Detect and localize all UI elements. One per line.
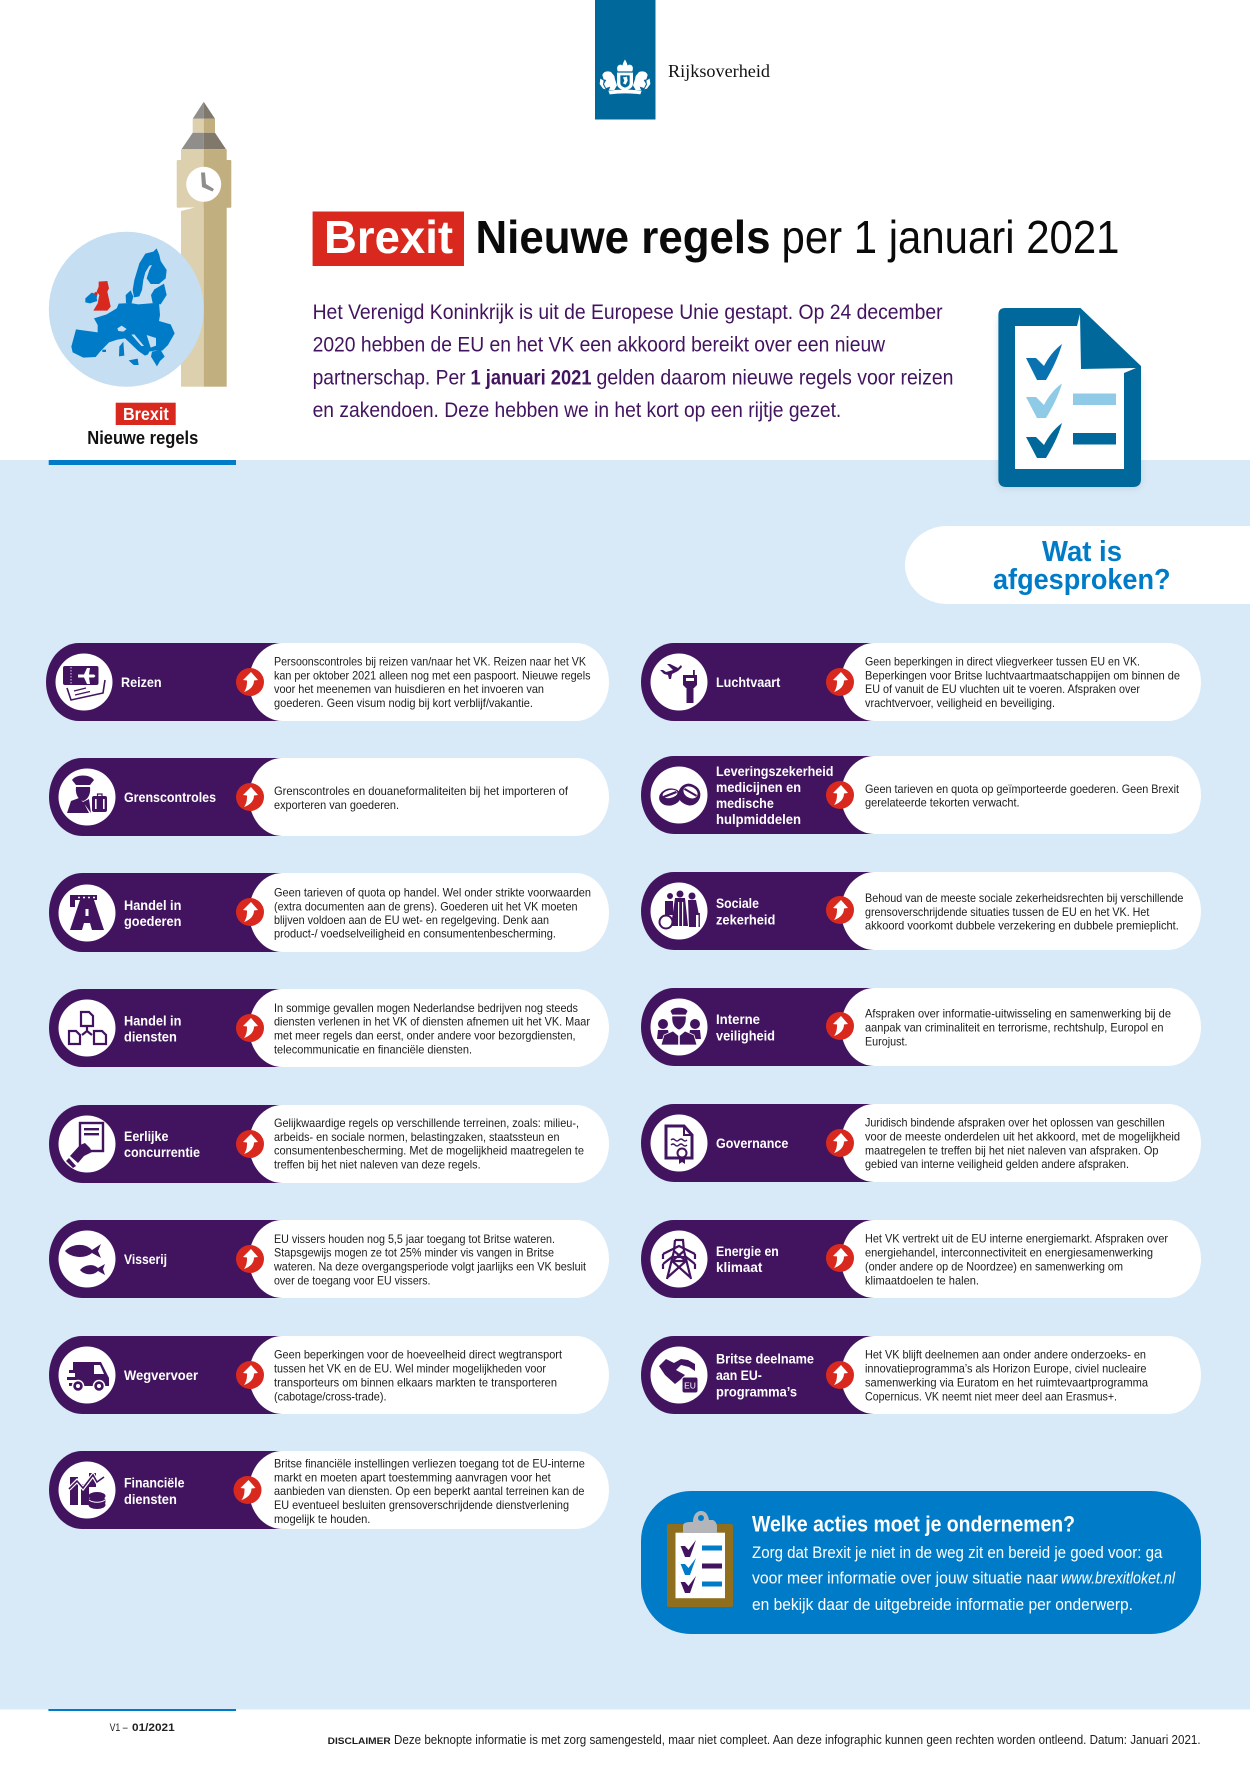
body text: (extra documenten aan de grens). Goederen uit het VK moeten <box>274 900 578 913</box>
body text: over de toegang voor EU vissers. <box>274 1274 430 1288</box>
label: Luchtvaart <box>716 674 781 690</box>
label: medische <box>716 795 774 811</box>
footer: version: 01/2021 <box>132 1722 175 1734</box>
body text: voor het meenemen van huisdieren en het invoeren van <box>274 683 544 696</box>
label <box>124 1474 185 1507</box>
title: Brexit <box>324 211 453 263</box>
icon: handshake with EU badge <box>659 1359 698 1393</box>
body text: diensten verlenen in het VK of diensten afnemen uit het VK. Maar <box>274 1016 590 1029</box>
label <box>124 897 181 929</box>
callout text: Zorg dat Brexit je niet in de weg zit en bereid je goed voor: ga <box>752 1543 1163 1562</box>
body text: klimaatdoelen te halen. <box>865 1274 979 1287</box>
light blue content band <box>0 460 1250 1710</box>
intro text <box>313 301 954 422</box>
label: Eerlijke <box>124 1128 169 1144</box>
callout text <box>752 1543 1176 1614</box>
arrow <box>826 1244 854 1272</box>
label: Governance <box>716 1135 788 1151</box>
body text: (cabotage/cross-trade). <box>274 1390 386 1403</box>
body text <box>865 1117 1180 1171</box>
footer: version <box>110 1722 175 1734</box>
body text: In sommige gevallen mogen Nederlandse bedrijven nog steeds <box>274 1002 578 1015</box>
body text <box>274 1002 590 1056</box>
icon: security officer <box>657 1007 701 1045</box>
body text: wateren. Na deze overgangsperiode volgt jaarlijks een VK besluit <box>273 1260 587 1274</box>
body text: kan per oktober 2021 alleen nog met een paspoort. Nieuwe regels <box>274 669 591 682</box>
intro text: 1 januari 2021 <box>470 366 592 390</box>
panel: Luchtvaart <box>641 643 1201 721</box>
arrow <box>826 1361 854 1389</box>
arrow <box>826 1012 854 1040</box>
label: Financiële <box>124 1474 185 1490</box>
body text: akkoord voorkomt dubbele verzekering en dubbele premieplicht. <box>865 920 1179 932</box>
panel: Grenscontroles <box>49 758 609 836</box>
callout text: voor meer informatie over jouw situatie naar <box>752 1568 1058 1588</box>
label: diensten <box>124 1028 177 1044</box>
body text: consumentenbescherming. Met de mogelijkheid maatregelen te <box>274 1145 584 1158</box>
body text <box>865 1008 1171 1048</box>
body text: EU of vanuit de EU vluchten uit te voeren. Afspraken over <box>865 683 1140 696</box>
label: Energie en <box>716 1243 779 1259</box>
body text <box>865 1233 1168 1287</box>
body text: (onder andere op de Noordzee) en samenwerking om <box>865 1261 1123 1274</box>
small badge: Brexit: Brexit <box>123 404 169 424</box>
body text: Persoonscontroles bij reizen van/naar het VK. Reizen naar het VK <box>274 656 586 668</box>
label: aan EU- <box>716 1367 762 1383</box>
icon: document with seal <box>666 1126 692 1164</box>
body text: Juridisch bindende afspraken over het oplossen van geschillen <box>865 1117 1165 1130</box>
body text: Geen tarieven en quota op geïmporteerde goederen. Geen Brexit <box>865 783 1180 796</box>
small heading: Nieuwe regels: Nieuwe regels <box>87 428 198 448</box>
label: hulpmiddelen <box>716 811 801 827</box>
callout text: en bekijk daar de uitgebreide informatie per onderwerp. <box>752 1595 1133 1614</box>
body text: product-/ voedselveiligheid en consumentenbescherming. <box>274 928 556 941</box>
icon: connected documents <box>69 1012 106 1044</box>
label: veiligheid <box>716 1028 775 1044</box>
label <box>716 1350 814 1400</box>
label: Reizen <box>121 674 162 690</box>
label <box>716 1243 779 1275</box>
label: Wegvervoer <box>124 1367 198 1383</box>
label <box>716 763 834 827</box>
panel: Reizen <box>46 643 609 721</box>
body text: Afspraken over informatie-uitwisseling en samenwerking bij de <box>865 1008 1171 1021</box>
body text: Geen beperkingen in direct vliegverkeer tussen EU en VK. <box>865 656 1140 668</box>
body text: Geen tarieven of quota op handel. Wel onder strikte voorwaarden <box>274 886 591 900</box>
title: Nieuwe regels <box>476 211 770 263</box>
icon: clipboard <box>667 1511 733 1607</box>
body text <box>865 1349 1149 1403</box>
body text <box>865 783 1180 810</box>
body text: Grenscontroles en douaneformaliteiten bij het importeren of <box>274 785 569 798</box>
body text: gebied van interne veiligheid gelden andere afspraken. <box>865 1158 1129 1171</box>
arrow <box>236 1130 264 1158</box>
arrow <box>236 1014 264 1042</box>
icon: fish <box>65 1244 105 1275</box>
body text <box>274 1117 584 1172</box>
intro text: en zakendoen. Deze hebben we in het kort op een rijtje gezet. <box>313 399 841 422</box>
icon: plane and control tower <box>660 664 697 703</box>
body text: aanpak van criminaliteit en terrorisme, rechtshulp, Europol en <box>865 1022 1164 1035</box>
label: Britse deelname <box>716 1350 814 1366</box>
body text: aanbieden van diensten. Op een beperkt aantal terreinen kan de <box>274 1485 584 1498</box>
icon: van <box>67 1362 109 1392</box>
body text: Geen beperkingen voor de hoeveelheid direct wegtransport <box>274 1349 563 1362</box>
label <box>124 1128 200 1160</box>
icon: tickets <box>63 666 105 700</box>
body text: Stapsgewijs mogen ze tot 25% minder vis vangen in Britse <box>274 1247 554 1260</box>
footer: disclaimer: Deze beknopte informatie is met zorg samengesteld, maar niet compleet. Aan deze infographic kunnen geen rechten worden ontleend. Datum: Januari 2021. <box>394 1733 1201 1747</box>
body text <box>273 1233 587 1288</box>
body text: gerelateerde tekorten verwacht. <box>865 797 1020 810</box>
body text: met meer regels dan eerst, onder andere voor bezorgdiensten, <box>274 1030 576 1042</box>
panel: Governance <box>641 1104 1201 1182</box>
body text: exporteren van goederen. <box>274 799 399 812</box>
icon: road with barrier <box>70 895 104 930</box>
panel: Financiële diensten <box>49 1451 609 1529</box>
arrow <box>826 1129 854 1157</box>
body text: grensoverschrijdende situaties tussen de EU en het VK. Het <box>865 906 1150 919</box>
icon: border officer <box>67 776 107 813</box>
body text: telecommunicatie en financiële diensten. <box>274 1043 472 1056</box>
panel: Interne veiligheid <box>641 988 1201 1066</box>
body text: samenwerking via Euratom en het ruimtevaartprogramma <box>865 1376 1149 1389</box>
intro text: partnerschap. Per <box>313 366 466 390</box>
body text: vrachtvervoer, veiligheid en beveiliging. <box>865 697 1055 710</box>
body text: EU eventueel besluiten grensoverschrijdende dienstverlening <box>274 1499 569 1512</box>
panel: Eerlijke concurrentie <box>49 1105 609 1183</box>
EU map <box>71 248 175 366</box>
body text: Gelijkwaardige regels op verschillende terreinen, zoals: milieu-, <box>274 1117 579 1130</box>
body text: energiehandel, interconnectiviteit en energiesamenwerking <box>865 1247 1153 1260</box>
logo: Rijksoverheid <box>595 0 770 120</box>
arrow <box>236 668 264 696</box>
arrow <box>826 896 854 924</box>
arrow <box>826 668 854 696</box>
panel: Energie en klimaat <box>641 1220 1201 1298</box>
callout: Welke acties moet je ondernemen? <box>641 1491 1201 1634</box>
arrow <box>236 1361 264 1389</box>
panel: Britse deelname aan EU-programma's <box>641 1336 1201 1414</box>
EU circle <box>49 232 204 387</box>
footer rule <box>48 1709 236 1711</box>
panel: Leveringszekerheid medicijnen en medische hulpmiddelen <box>641 756 1201 834</box>
icon: handshake with EU badge: EU <box>684 1380 696 1390</box>
label: goederen <box>124 913 181 929</box>
body text: voor de meeste onderdelen uit het akkoord, met de mogelijkheid <box>865 1131 1180 1144</box>
label: Interne <box>716 1011 760 1027</box>
blue rule under small heading <box>49 460 236 465</box>
icon: pills <box>657 780 704 809</box>
icon: people with wheelchair <box>660 890 700 928</box>
body text: blijven voldoen aan de EU wet- en regelgeving. Denk aan <box>274 914 549 927</box>
body text: transporteurs om binnen elkaars markten te transporteren <box>274 1377 557 1390</box>
icon: charts and coins <box>69 1473 106 1509</box>
body text: tussen het VK en de EU. Wel minder mogelijkheden voor <box>274 1363 546 1376</box>
label: Sociale <box>716 895 759 911</box>
body text: mogelijk te houden. <box>274 1513 370 1526</box>
panel: Handel in diensten <box>49 989 609 1067</box>
body text: Eurojust. <box>865 1036 908 1048</box>
body text <box>274 656 591 710</box>
body text: arbeids- en sociale normen, belastingzaken, staatssteun en <box>274 1131 560 1144</box>
heading pill: Wat is afgesproken? <box>905 526 1250 604</box>
panel: Wegvervoer <box>49 1336 609 1414</box>
arrow <box>236 1245 264 1273</box>
label: Leveringszekerheid <box>716 763 834 779</box>
icon: Big Ben and EU map <box>49 102 231 387</box>
icon: checklist document <box>998 308 1141 487</box>
icon: hand holding document <box>66 1123 103 1168</box>
body text: maatregelen te treffen bij het niet naleven van afspraken. Op <box>865 1144 1158 1157</box>
title <box>313 211 1120 266</box>
callout text: www.brexitloket.nl <box>1061 1568 1176 1588</box>
label: programma’s <box>716 1384 797 1400</box>
label <box>716 1011 775 1044</box>
callout heading: Welke acties moet je ondernemen? <box>752 1512 1075 1536</box>
body text <box>865 656 1180 710</box>
label: Handel in <box>124 1012 181 1028</box>
body text: Beperkingen voor Britse luchtvaartmaatschappijen om binnen de <box>865 669 1180 682</box>
label: Handel in <box>124 897 181 913</box>
footer: disclaimer: DISCLAIMER <box>328 1736 391 1747</box>
body text: EU vissers houden nog 5,5 jaar toegang tot Britse wateren. <box>274 1233 555 1246</box>
label: zekerheid <box>716 912 775 928</box>
body text: Het VK blijft deelnemen aan onder andere onderzoeks- en <box>865 1349 1146 1362</box>
icon: Big Ben tower <box>177 102 231 387</box>
intro text: gelden daarom nieuwe regels voor reizen <box>596 366 954 390</box>
logo wordmark: Rijksoverheid <box>668 61 770 81</box>
body text: Behoud van de meeste sociale zekerheidsrechten bij verschillende <box>865 892 1183 905</box>
body text: markt en moeten apart toestemming aanvragen voor het <box>274 1472 551 1484</box>
body text <box>274 886 591 941</box>
footer: version: V1 – <box>110 1722 128 1734</box>
panel: Visserij <box>49 1220 609 1298</box>
label <box>716 895 775 928</box>
label <box>124 1012 181 1044</box>
panel: Handel in goederen <box>49 873 609 952</box>
arrow <box>826 781 854 809</box>
panel: Sociale zekerheid <box>641 872 1201 950</box>
body text <box>274 785 569 812</box>
icon: crest <box>600 59 650 94</box>
label: diensten <box>124 1491 177 1507</box>
icon: power pylon <box>663 1240 695 1279</box>
title: per 1 januari 2021 <box>782 211 1120 263</box>
label: medicijnen en <box>716 779 801 795</box>
arrow <box>236 783 264 811</box>
body text: treffen bij het niet naleven van deze regels. <box>274 1158 481 1172</box>
intro text: 2020 hebben de EU en het VK een akkoord bereikt over een nieuw <box>313 334 886 356</box>
label: klimaat <box>716 1259 763 1275</box>
label: Grenscontroles <box>124 789 216 805</box>
body text: Copernicus. VK neemt niet meer deel aan Erasmus+. <box>865 1390 1117 1403</box>
arrow <box>234 1476 262 1504</box>
label: Visserij <box>124 1251 167 1267</box>
body text <box>274 1349 563 1403</box>
body text <box>274 1458 585 1526</box>
heading pill: Wat is afgesproken?: afgesproken? <box>993 564 1171 596</box>
label: concurrentie <box>124 1144 200 1160</box>
body text <box>865 892 1183 932</box>
body text: goederen. Geen visum nodig bij kort verblijf/vakantie. <box>274 697 533 710</box>
body text: Het VK vertrekt uit de EU interne energiemarkt. Afspraken over <box>865 1233 1168 1246</box>
arrow <box>236 898 264 926</box>
body text: innovatieprogramma’s als Horizon Europe, civiel nucleaire <box>865 1362 1146 1375</box>
heading pill: Wat is afgesproken?: Wat is <box>1042 536 1122 568</box>
intro text: Het Verenigd Koninkrijk is uit de Europese Unie gestapt. Op 24 december <box>313 301 943 324</box>
body text: Britse financiële instellingen verliezen toegang tot de EU-interne <box>274 1458 585 1471</box>
